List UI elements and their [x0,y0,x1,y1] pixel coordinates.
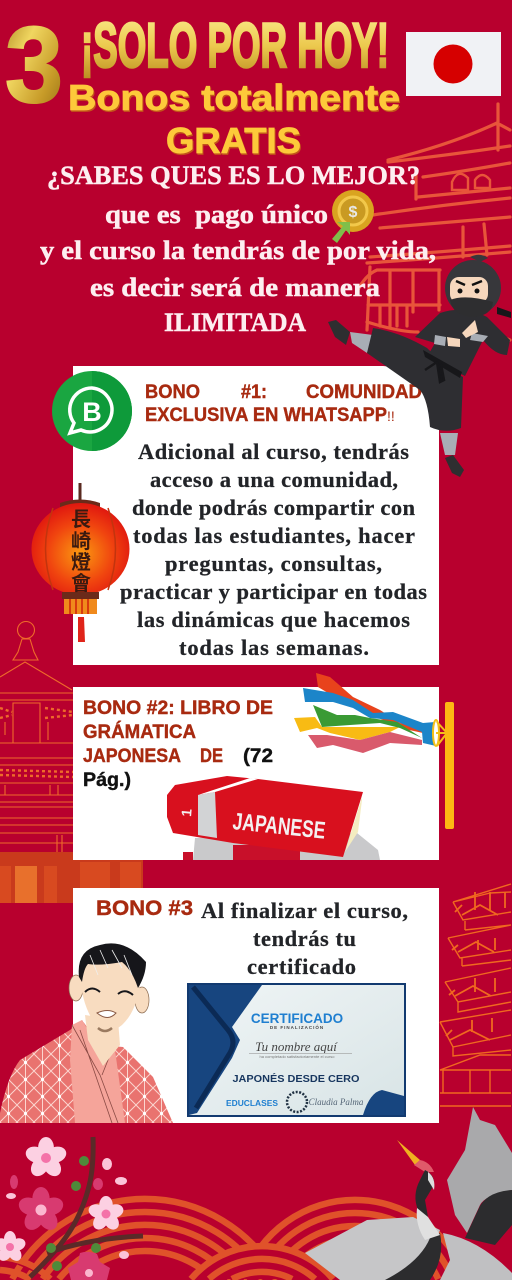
crane [305,1107,512,1280]
certificate: EDUCLASES [226,1098,278,1108]
certificate: DE FINALIZACIÓN [270,1023,324,1030]
heading: bono 2: GRÁMATICA [83,720,196,743]
temple outline left [0,622,73,880]
panel: bono 3 [73,888,439,1123]
heading: bono 2: (72 [243,745,273,767]
temple lower facade [0,852,143,903]
subtitle [68,77,401,162]
corner cut of panel 1 [383,365,440,412]
text: bono 3 description [201,898,408,979]
certificate [187,983,406,1117]
certificate: JAPONÉS DESDE CERO [232,1072,360,1085]
intro text [40,161,436,337]
intro text: ILIMITADA [164,308,306,337]
certificate: CERTIFICADO [251,1011,343,1026]
text: bono 1 description: todas las semanas. [179,635,369,660]
heading: bono 2: BONO #2: LIBRO DE [83,697,273,719]
lantern: 會 [71,571,91,595]
man in kimono [0,943,173,1123]
windsock streamers [294,673,454,829]
heading: bono 2: Pág.) [83,769,131,791]
heading: bono 1 [145,381,422,426]
text: bono 1 description: todas las estudiantes, hacer [133,523,415,548]
illustration: japanese book: JAPANESE [231,808,327,845]
heading: bono 2: JAPONESA [83,745,181,767]
cherry blossom branch [0,1137,143,1280]
lantern [32,483,130,642]
icon: coin with arrow: $ [349,204,358,221]
certificate: Claudia Palma [309,1097,364,1107]
text: bono 1 description: Adicional al curso, tendrás [138,439,409,464]
text: bono 1 description: las dinámicas que hacemos [137,607,410,632]
heading: bono 1: #1: [241,381,267,403]
illustration: japanese book: 1 [178,808,195,817]
heading: bono 1: BONO [145,381,200,403]
subtitle: GRATIS [167,122,302,162]
subtitle: Bonos totalmente [69,78,401,120]
panel: bono 1 [73,366,439,665]
heading: bono 2 [83,697,273,791]
intro text: ¿SABES QUES ES LO MEJOR? [47,161,420,190]
intro text: que es pago único [105,200,328,229]
lantern: 長 [71,509,91,531]
text: bono 1 description: acceso a una comunidad, [150,467,398,492]
heading: bono 1: EXCLUSIVA EN WHATSAPP [145,404,387,426]
lantern: 燈 [71,551,91,574]
certificate: ha completado satisfactoriamente el curso [260,1054,335,1059]
intro text: es decir será de manera [90,273,380,302]
text: bono 3 description: certificado [247,954,356,979]
subtitle: Bonos totalmente [68,77,400,118]
illustration: japanese book [167,776,380,860]
text: bono 1 description: donde podrás compartir con [132,495,415,520]
lantern: 崎 [71,530,91,553]
wave pattern [0,1199,466,1279]
icon: coin with arrow [332,190,374,243]
ninja [328,255,511,477]
text: bono 1 description [120,439,427,660]
temple outline top right [357,104,510,340]
heading: bono 1: COMUNIDAD [306,381,422,403]
icon: whatsapp business: B [82,397,102,427]
number 3: 3 [5,4,63,125]
text: bono 1 description: practicar y participar en todas [120,579,427,604]
panel: bono 2 [73,687,439,860]
heading: bono 3: BONO #3 [96,896,193,920]
heading: bono 1: !! [387,408,395,424]
pagoda right [440,884,511,1106]
text: bono 1 description: preguntas, consultas, [165,551,382,576]
certificate: Tu nombre aquí [255,1039,338,1054]
text: bono 3 description: Al finalizar el curso, [201,898,408,923]
intro text: y el curso la tendrás de por vida, [40,236,436,265]
text: bono 3 description: tendrás tu [253,926,356,951]
heading: bono 2: DE [200,745,223,767]
subtitle: GRATIS [166,120,301,161]
icon: whatsapp business [52,371,132,451]
flag of Japan [406,32,501,96]
